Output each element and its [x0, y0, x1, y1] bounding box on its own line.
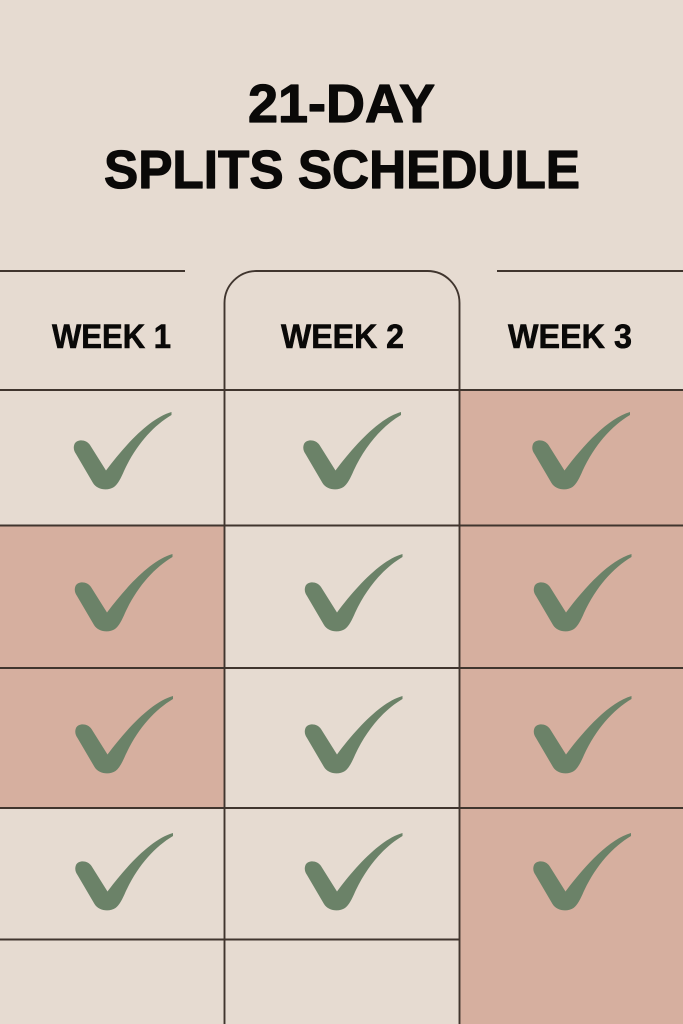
title	[104, 74, 580, 200]
check marks	[74, 412, 632, 910]
title: SPLITS SCHEDULE	[104, 140, 580, 200]
panel: highlighted cells week 3	[460, 390, 683, 1024]
week 2 heading: WEEK 2	[281, 318, 404, 356]
icon: check week 3 row 3	[534, 696, 632, 773]
icon: check week 1 row 2	[75, 554, 172, 631]
week 1 heading: WEEK 1	[52, 318, 171, 356]
icon: check week 3 row 4	[533, 833, 631, 910]
icon: check week 2 row 3	[305, 696, 402, 773]
icon: check week 2 row 4	[305, 833, 402, 910]
icon: check week 1 row 1	[74, 412, 172, 489]
icon: check week 3 row 1	[532, 412, 630, 489]
panel: highlighted cells week 1	[0, 526, 224, 808]
icon: check week 3 row 2	[534, 554, 632, 631]
icon: check week 2 row 1	[303, 412, 401, 489]
week 3 heading: WEEK 3	[508, 318, 632, 356]
icon: check week 1 row 3	[75, 696, 173, 773]
icon: check week 1 row 4	[75, 833, 173, 910]
schedule grid lines	[0, 271, 683, 1024]
icon: check week 2 row 2	[305, 554, 402, 631]
title: 21-DAY	[248, 74, 435, 134]
